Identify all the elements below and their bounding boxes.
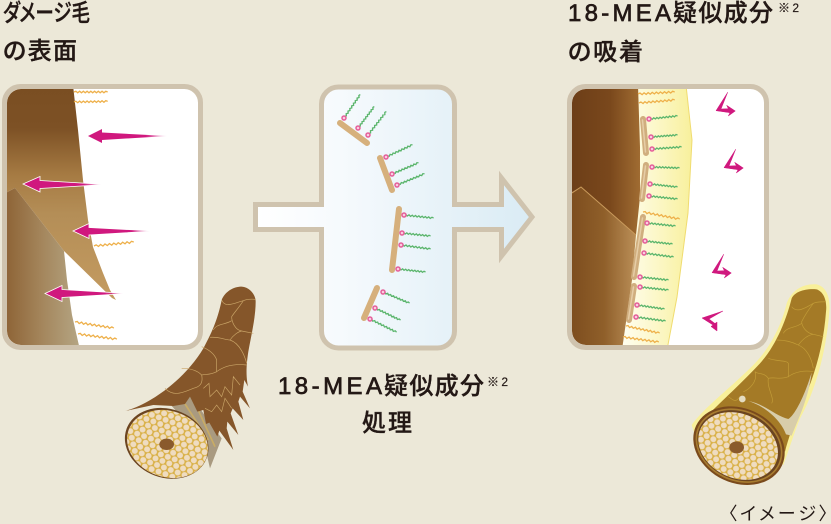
- small highlight dot: [739, 396, 746, 402]
- molecule 3: [392, 209, 434, 273]
- label: 18-MEA treatment: 18-MEA: [278, 373, 382, 400]
- repaired lower strand: [572, 188, 636, 345]
- orange chains: [623, 91, 680, 343]
- adsorbed molecule bars: [629, 119, 646, 320]
- green chains: [636, 115, 682, 322]
- heading: adsorption: 疑似成分: [673, 0, 773, 27]
- hair core: [159, 439, 174, 450]
- cross section: [680, 392, 798, 500]
- heading: damaged hair surface: ダメージ毛: [3, 0, 90, 27]
- panel and arrow: treatment flow: [256, 87, 532, 348]
- exposed inner shaft: [172, 395, 222, 468]
- heading: adsorption: の吸着: [568, 39, 643, 66]
- repaired upper strand: [572, 89, 640, 234]
- arrow: damage 2: [23, 176, 106, 192]
- molecule 1: [340, 94, 387, 143]
- orange fatty acid chains: [74, 91, 134, 340]
- illustration: repaired hair strand: [680, 284, 830, 500]
- caption: image: 〈イメージ〉: [728, 504, 828, 524]
- cross section: [115, 396, 219, 490]
- deflected arrow 1: [716, 92, 735, 116]
- deflected arrow 2: [724, 149, 743, 173]
- strand seam: [572, 187, 636, 235]
- label: 18-MEA treatment: [278, 373, 508, 437]
- panel: repaired hair close-up: [565, 85, 766, 350]
- label: 18-MEA treatment: 疑似成分: [384, 373, 484, 400]
- arrow: damage 1: [88, 129, 168, 143]
- molecule 2: [380, 144, 425, 190]
- arrow: damage 4: [45, 286, 128, 302]
- gold cuticle body: [695, 289, 826, 452]
- heading: damaged hair surface: [3, 0, 90, 65]
- cuticle cracks: [165, 299, 256, 412]
- panel: damaged hair close-up: [0, 85, 200, 350]
- highlight: [748, 372, 812, 436]
- illustration: damaged hair strand: [115, 287, 256, 490]
- deflected arrow 4: [702, 311, 723, 331]
- cuticle cracks: [728, 302, 826, 403]
- torn cuticle body: [125, 287, 256, 450]
- upper cuticle strand: [0, 85, 116, 300]
- pink molecule heads: [634, 117, 654, 319]
- molecule 4: [364, 288, 410, 333]
- heading: adsorption: [568, 0, 799, 66]
- label: 18-MEA treatment: 処理: [362, 410, 412, 437]
- arrow: damage 3: [73, 224, 155, 238]
- hair core: [729, 441, 744, 453]
- heading: adsorption: ※2: [778, 1, 799, 15]
- yellow protective layer: [620, 85, 692, 350]
- yellow coating: [692, 284, 830, 465]
- lower strand: [7, 188, 79, 345]
- heading: damaged hair surface: の表面: [3, 38, 77, 65]
- heading: adsorption: 18-MEA: [568, 0, 671, 27]
- label: 18-MEA treatment: ※2: [487, 375, 508, 389]
- deflected arrow 3: [712, 254, 731, 278]
